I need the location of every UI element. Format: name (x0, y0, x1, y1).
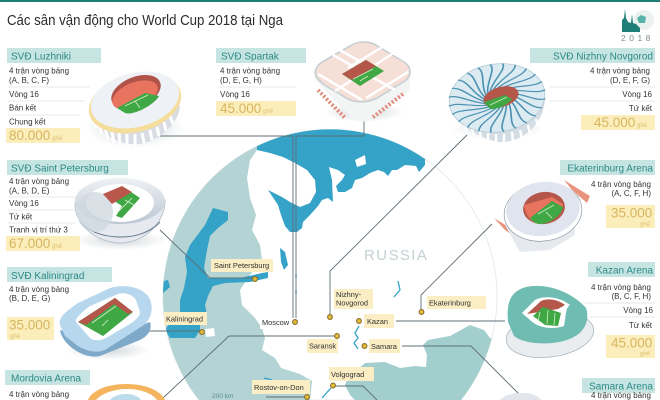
panel: SVĐ Spartak (216, 42, 410, 122)
stadium illustration (444, 57, 550, 144)
scale: 200 km: 200 km (212, 393, 233, 400)
capacity: ghế (640, 352, 651, 358)
capacity: ghế (52, 244, 63, 250)
heading (560, 160, 655, 175)
match list: 4 trận vòng bảng (590, 66, 650, 76)
city: Saransk: Saransk (309, 342, 336, 350)
city: Kaliningrad: Kaliningrad (166, 314, 203, 324)
capacity: 45.000 (594, 115, 635, 130)
match list: Tranh vị trí thứ 3 (9, 226, 68, 234)
capacity: 45.000 (220, 101, 261, 116)
heading: Samara Arena (589, 382, 653, 392)
label: RUSSIA: RUSSIA (364, 247, 428, 264)
match list (550, 66, 655, 113)
match list: Bán kết (9, 104, 37, 112)
match list: 4 trận vòng bảng (9, 66, 69, 76)
capacity: ghế (52, 136, 63, 142)
heading (7, 48, 101, 63)
heading (7, 160, 128, 175)
panel: Ekaterinburg Arena (494, 160, 655, 252)
match list: 4 trận vòng bảng (9, 285, 69, 294)
capacity: ghế (637, 123, 648, 129)
heading (582, 378, 655, 393)
city: Moscow: Moscow (262, 318, 290, 327)
map base circle (163, 129, 497, 400)
stadium illustration (88, 384, 165, 400)
capacity (7, 317, 54, 340)
stadium illustration (82, 63, 188, 148)
match list: (A, B, D, E) (9, 186, 50, 196)
city: Volgograd (329, 367, 374, 388)
heading (7, 267, 112, 282)
city: Nizhny-Novgorod: Novgorod (336, 298, 368, 308)
city: Moscow (260, 316, 297, 329)
city: Nizhny-Novgorod (328, 289, 373, 319)
city: Saint Petersburg (211, 259, 273, 281)
match list: Vòng 16 (622, 90, 653, 99)
capacity: 45.000 (611, 336, 652, 350)
capacity (606, 205, 655, 228)
heading: SVĐ Saint Petersburg (11, 164, 109, 174)
city: Volgograd: Volgograd (331, 370, 364, 379)
match list (8, 66, 90, 126)
match list: Vòng 16 (623, 306, 654, 315)
match list: Chung kết (9, 118, 46, 126)
match list: Tứ kết (629, 104, 653, 113)
match list: Từ kết (629, 321, 653, 330)
match list: (B, C, F, H) (611, 292, 651, 301)
panel: SVĐ Saint Petersburg (6, 160, 166, 251)
match list: (A, C, F, H) (611, 189, 651, 198)
capacity: 35.000 (611, 206, 652, 220)
capacity: ghế (640, 222, 651, 228)
logo: World Cup 2018: 2018 (621, 33, 654, 43)
city: Rostov-on-Don: Rostov-on-Don (254, 383, 304, 392)
heading: SVĐ Kaliningrad (11, 271, 84, 282)
match list: (B, D, E, G) (9, 294, 51, 303)
map regions (160, 125, 500, 400)
heading: SVĐ Spartak (221, 52, 280, 62)
match list: 4 trận vòng bảng (591, 391, 651, 400)
capacity: 67.000 (9, 236, 50, 251)
city: Ekaterinburg: Ekaterinburg (429, 298, 471, 308)
city: Samara (362, 339, 400, 353)
city: Kaliningrad (164, 312, 207, 334)
capacity: 35.000 (9, 318, 50, 332)
heading: Ekaterinburg Arena (567, 164, 653, 174)
heading: SVĐ Nizhny Novgorod (553, 52, 653, 62)
map: Russia and neighbours (160, 125, 500, 400)
match list (8, 177, 76, 234)
city: Saint Petersburg: Saint Petersburg (214, 261, 269, 270)
stadium illustration (500, 393, 541, 400)
capacity: ghế (10, 334, 21, 340)
capacity (581, 115, 655, 130)
city: Samara: Samara (371, 342, 398, 351)
match list (218, 66, 296, 99)
title: Các sân vận động cho World Cup 2018 tại Nga (7, 13, 283, 29)
capacity (216, 101, 296, 116)
heading (5, 370, 90, 385)
top bar (0, 0, 660, 2)
match list: 4 trận vòng bảng (591, 283, 651, 292)
city markers (164, 259, 486, 399)
match list (591, 180, 651, 198)
panel: SVĐ Nizhny Novgorod (444, 48, 655, 144)
match list: (D, E, G, H) (220, 76, 262, 85)
match list: 4 trận vòng bảng (9, 177, 69, 186)
capacity: 80.000 (9, 128, 50, 143)
stadium illustration (315, 42, 410, 122)
match list: Vòng 16 (9, 199, 39, 208)
stadium illustration (503, 286, 597, 363)
capacity (6, 128, 80, 143)
heading (530, 48, 655, 63)
heading: SVĐ Luzhniki (11, 52, 71, 62)
city: Nizhny-Novgorod: Nizhny- (336, 290, 362, 299)
capacity (6, 236, 80, 251)
match list: 4 trận vòng bảng (9, 390, 69, 399)
match list: Vòng 16 (220, 90, 250, 99)
match list: 4 trận vòng bảng (220, 66, 280, 76)
match list (9, 285, 69, 303)
stadium illustration (60, 286, 152, 360)
heading: Mordovia Arena (11, 374, 81, 384)
panel: SVĐ Luzhniki (6, 48, 188, 148)
capacity (606, 335, 655, 358)
panel: SVĐ Kaliningrad (7, 267, 152, 360)
city: Rostov-on-Don (252, 380, 310, 399)
match list: (A, B, C, F) (9, 76, 49, 85)
match list: Vòng 16 (9, 90, 39, 99)
panel: Samara Arena (500, 378, 655, 400)
stadium illustration (74, 178, 166, 250)
city: Saransk (307, 334, 339, 353)
city: Ekaterinburg (419, 296, 486, 314)
heading (588, 262, 655, 277)
match list: (D, E, F, G) (610, 76, 650, 85)
match list: Tứ kết (9, 212, 33, 222)
panel: Kazan Arena (503, 262, 655, 363)
city: Kazan (357, 314, 394, 328)
match list (585, 283, 655, 330)
leader lines (146, 120, 520, 400)
heading: Kazan Arena (596, 266, 653, 276)
heading (216, 48, 306, 63)
capacity: ghế (263, 109, 274, 115)
match list: 4 trận vòng bảng (591, 180, 651, 189)
panel: Mordovia Arena (5, 370, 165, 400)
stadium illustration (494, 177, 590, 252)
city: Kazan: Kazan (367, 317, 388, 326)
logo: World Cup 2018 (621, 9, 654, 43)
